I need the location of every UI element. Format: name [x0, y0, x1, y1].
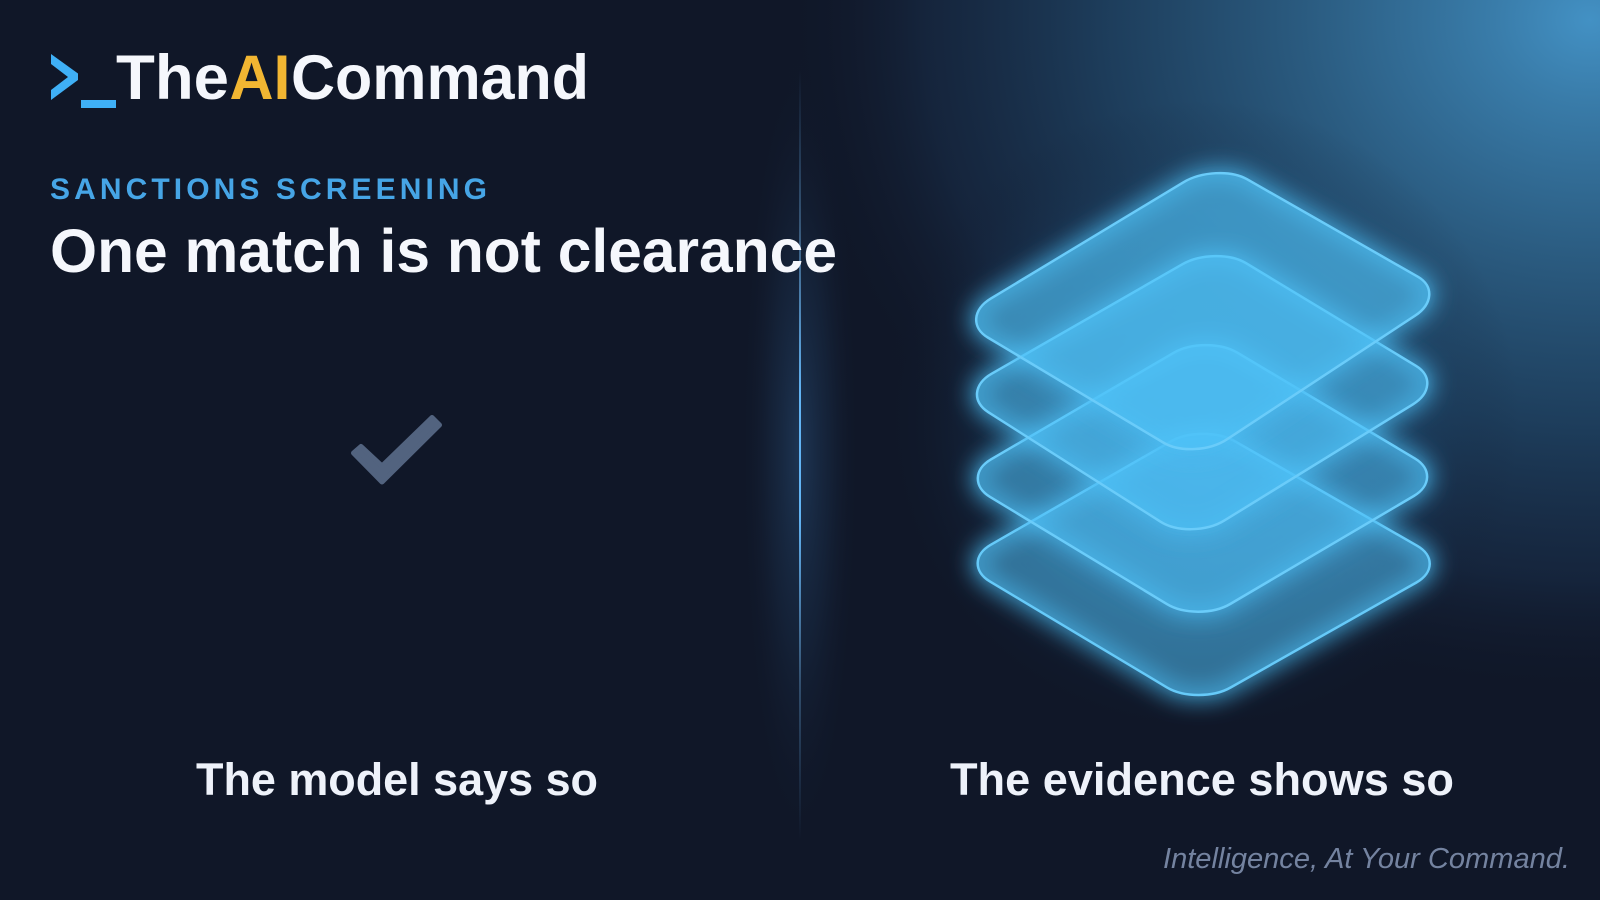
layer 4: [978, 434, 1430, 695]
icon: terminal prompt: [51, 54, 116, 108]
tagline: Intelligence, At Your Command.: [1163, 843, 1570, 875]
layer 2: [977, 256, 1427, 529]
vertical divider: [740, 50, 860, 850]
right caption: The evidence shows so: [950, 754, 1454, 805]
title: One match is not clearance: [50, 217, 837, 285]
layer 3: [978, 345, 1427, 612]
icon: check mark: [354, 418, 440, 482]
left caption: The model says so: [196, 754, 598, 805]
logo wordmark: Command: [291, 43, 589, 113]
logo: [51, 43, 589, 113]
layer 1: [976, 173, 1429, 449]
top-right corner glow: [780, 0, 1600, 720]
icon: stacked evidence layers: [976, 173, 1430, 695]
logo wordmark: [116, 43, 589, 113]
logo wordmark: The: [116, 43, 229, 113]
logo wordmark: AI: [230, 43, 290, 113]
kicker heading: SANCTIONS SCREENING: [50, 173, 487, 206]
glow behind layer stack: [880, 100, 1520, 740]
